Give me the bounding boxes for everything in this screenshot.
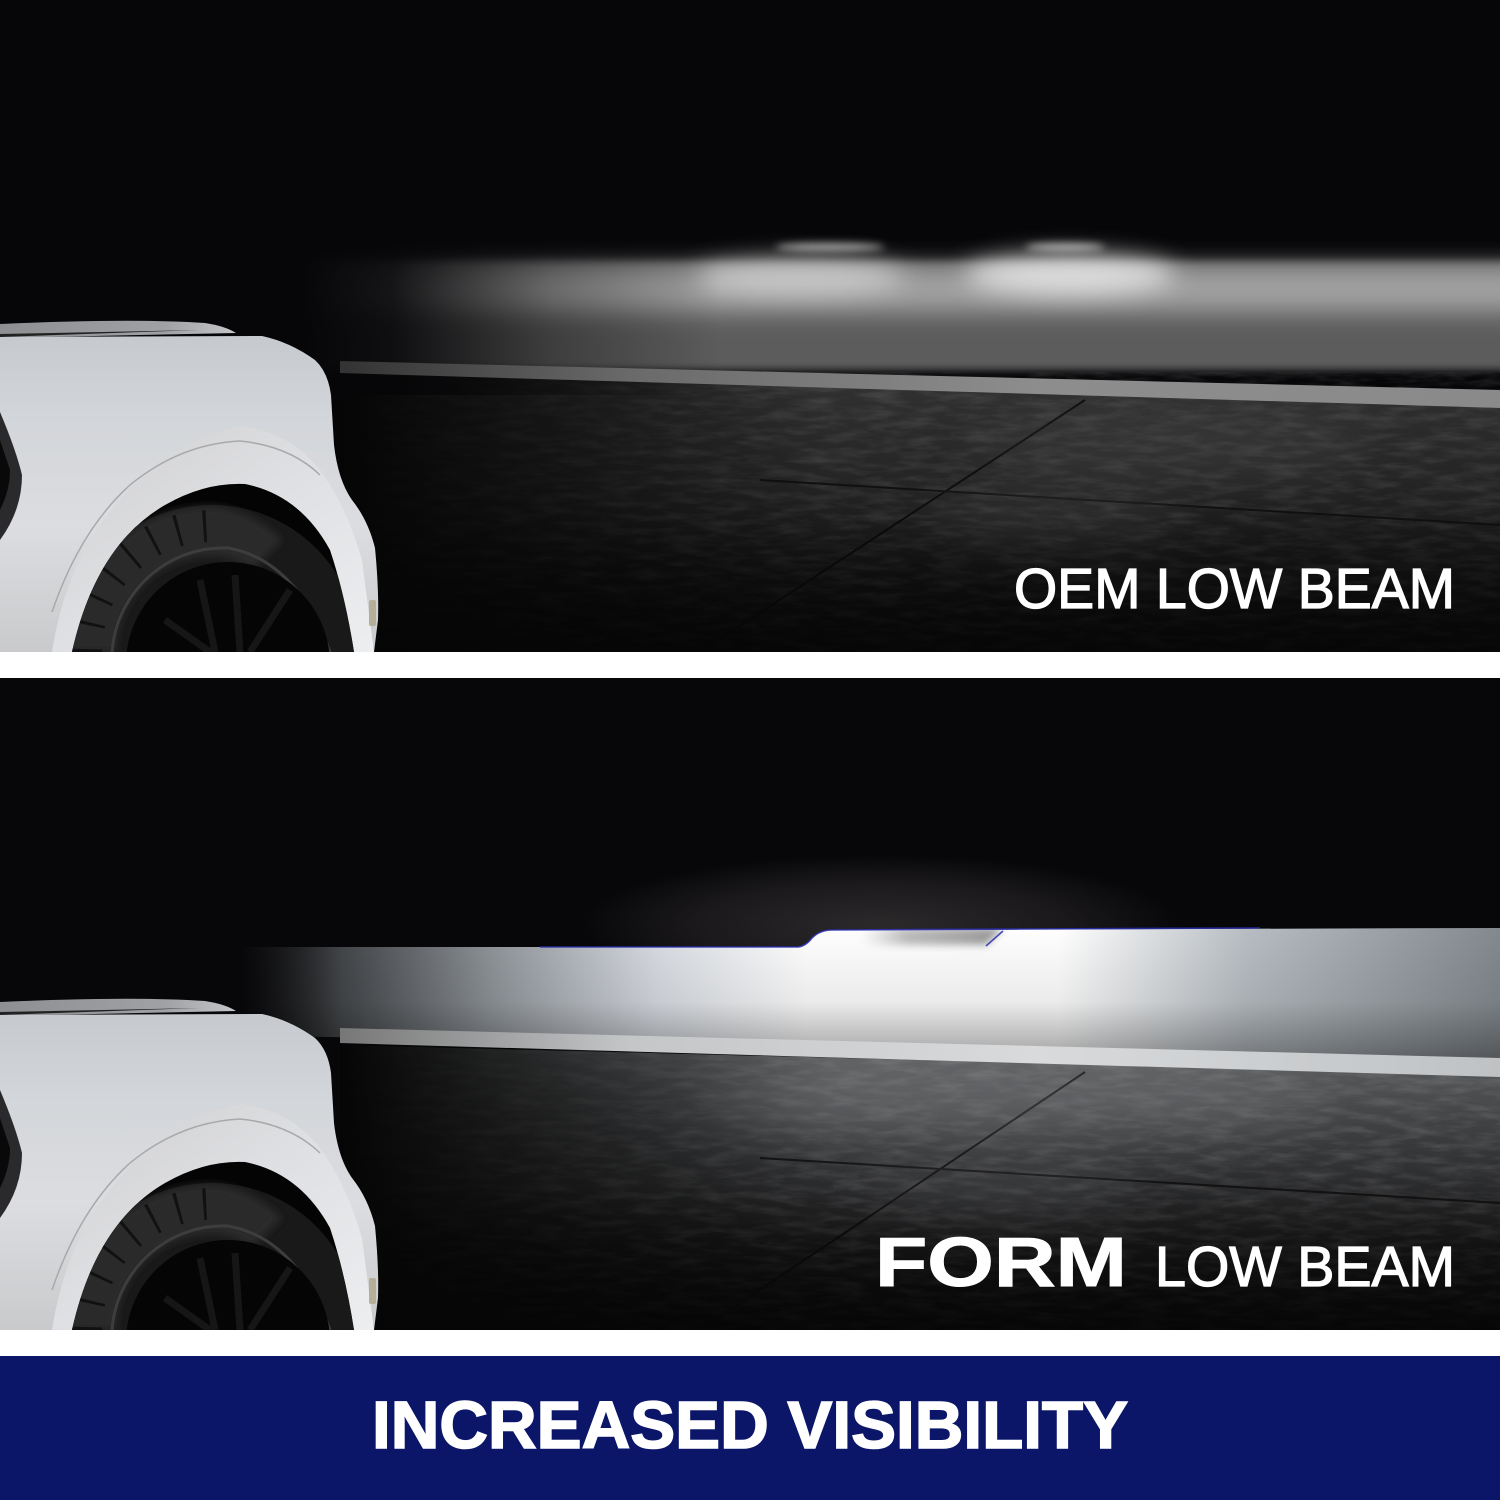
side marker <box>369 600 376 626</box>
floor: OEM <box>428 372 1500 627</box>
fender body <box>0 1014 378 1330</box>
taillight <box>0 1090 22 1218</box>
taillight <box>0 412 22 540</box>
floor: FORM <box>392 1046 1500 1306</box>
wheel arch flare <box>52 1135 374 1330</box>
rim <box>126 562 330 652</box>
car: white front fender and wheel <box>0 998 378 1330</box>
rim <box>126 1240 330 1330</box>
banner heading: INCREASED VISIBILITY <box>372 1388 1128 1463</box>
beam pattern: FORM sharp cutoff <box>240 925 1500 1065</box>
upper trim strip <box>0 321 236 338</box>
wheel well <box>72 484 354 652</box>
cutoff edge <box>540 928 1260 947</box>
fender body <box>0 336 378 652</box>
panel: OEM low beam photo <box>0 0 1500 652</box>
side marker <box>369 1278 376 1304</box>
ambient wall glow above cutoff <box>628 866 1132 946</box>
label: low beam: LOW BEAM <box>1155 1235 1455 1299</box>
car: white front fender and wheel <box>0 320 378 652</box>
beam pattern: OEM soft wash <box>350 234 1500 392</box>
curb line: FORM <box>340 1028 1500 1077</box>
panel: FORM low beam photo <box>0 678 1500 1330</box>
banner: navy footer <box>0 1356 1500 1500</box>
tire <box>72 1182 354 1330</box>
tire <box>72 504 354 652</box>
wheel arch flare <box>52 458 374 652</box>
upper trim strip <box>0 999 236 1016</box>
label: FORM logo wordmark: FORM <box>875 1223 1127 1301</box>
wheel well <box>72 1162 354 1330</box>
label: OEM low beam: OEM LOW BEAM <box>1014 557 1455 621</box>
curb line: OEM <box>340 361 1500 408</box>
